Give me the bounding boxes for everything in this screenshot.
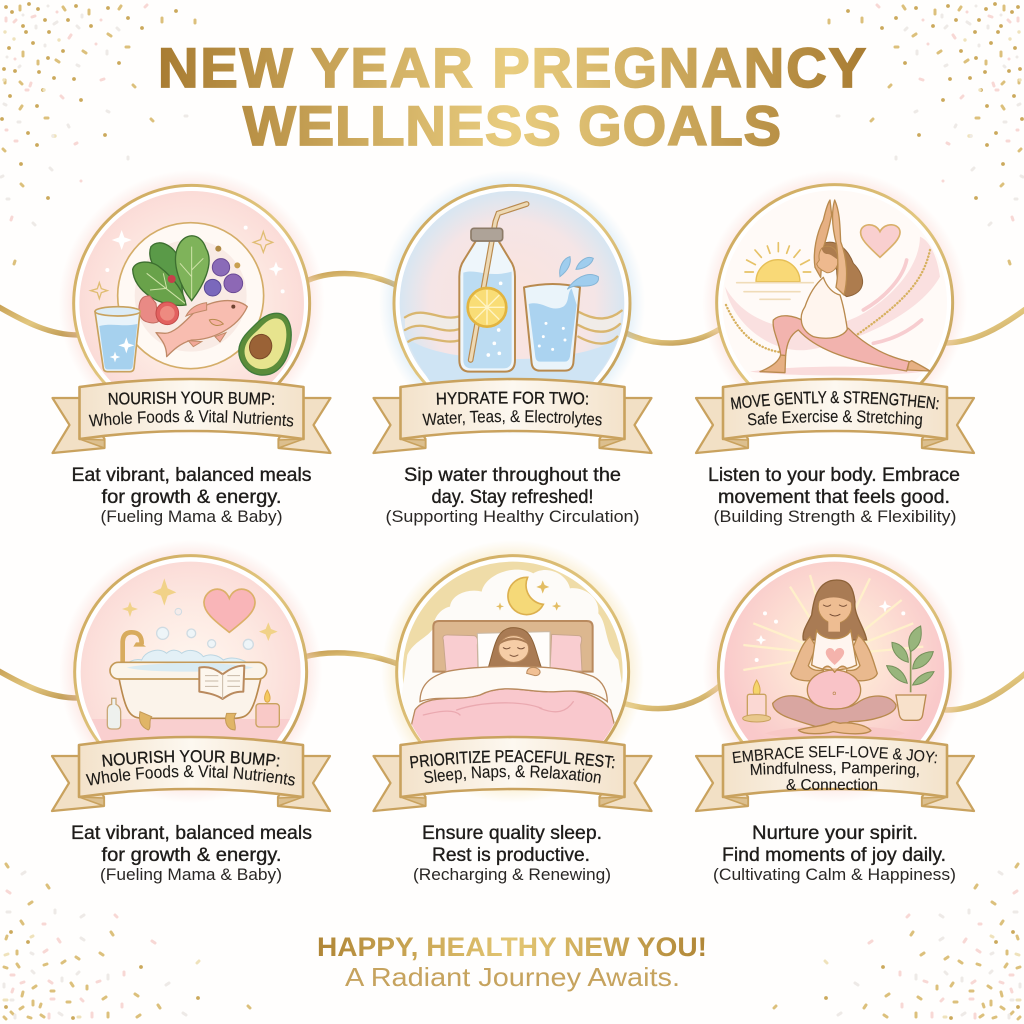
text: bath description [71,823,312,884]
text: nourish description: Eat vibrant, balanced meals [72,465,312,486]
banner: bath: NOURISH YOUR BUMP: [102,750,280,767]
text: nourish description: (Fueling Mama & Baby) [100,507,282,526]
illustration: sleeping in bed [381,540,644,803]
panel: nourish (food) [51,176,332,526]
banner: hydrate: Water, Teas, & Electrolytes [422,410,602,428]
banner: rest: PRIORITIZE PEACEFUL REST: [410,750,615,768]
text: move description: (Building Strength & Flexibility) [714,507,956,526]
title: WELLNESS GOALS [243,94,781,157]
banner: rest [372,736,653,812]
text: nourish description: for growth & energy. [102,487,282,508]
panel: self-love [694,546,976,884]
panel: hydrate [372,176,653,526]
text: rest description [413,823,611,884]
text: hydrate description [386,465,640,526]
illustration: bottle and glass [379,170,645,437]
text: move description: Listen to your body. Embrace [708,465,960,486]
banner: move: MOVE GENTLY & STRENGTHEN: [730,391,939,410]
illustration: meditating mother [703,540,966,803]
footer tagline [317,932,707,992]
illustration: plate of food [58,170,325,437]
banner: bath: Whole Foods & Vital Nutrients [86,764,295,786]
text: hydrate description: Sip water throughout the [404,465,621,486]
footer tagline: HAPPY, HEALTHY NEW YOU! [317,932,707,962]
text: bath description: Eat vibrant, balanced meals [71,823,312,844]
text: hydrate description: (Supporting Healthy Circulation) [386,507,640,526]
banner: move [694,378,976,454]
text: move description [708,465,960,526]
text: rest description: Ensure quality sleep. [422,823,602,844]
text: nourish description [72,465,312,526]
connecting ribbon: row 1 [0,274,1024,343]
text: self-love description: Nurture your spirit. [752,823,918,844]
text: move description: movement that feels good. [718,487,950,508]
banner: nourish [51,378,332,454]
title [158,36,866,157]
banner: hydrate: HYDRATE FOR TWO: [436,392,588,405]
text: rest description: (Recharging & Renewing) [413,865,611,884]
text: self-love description: (Cultivating Calm & Happiness) [713,865,956,884]
banner: nourish: Whole Foods & Vital Nutrients [88,410,294,427]
panel: rest [372,544,653,884]
text: hydrate description: day. Stay refreshed! [432,487,594,508]
text: self-love description: Find moments of joy daily. [722,845,946,866]
panel: bath self-care [50,546,332,884]
text: self-love description [713,823,956,884]
banner: self-love: Mindfulness, Pampering, [750,762,919,778]
title: NEW YEAR PREGNANCY [158,36,866,99]
banner: nourish: NOURISH YOUR BUMP: [108,392,274,405]
banner: rest: Sleep, Naps, & Relaxation [424,765,601,784]
banner: move: Safe Exercise & Stretching [748,410,922,429]
banner: bath [50,736,332,812]
illustration: prenatal yoga lunge [702,170,967,435]
banner: self-love: EMBRACE SELF-LOVE & JOY: [732,746,937,764]
illustration: bubble bath [59,540,322,803]
banner: self-love: & Connection [786,777,878,794]
text: bath description: for growth & energy. [102,845,282,866]
panel: move [694,176,976,526]
footer tagline: A Radiant Journey Awaits. [345,962,680,992]
connecting ribbon: row 2 [0,653,1024,710]
banner: hydrate [372,378,653,454]
text: bath description: (Fueling Mama & Baby) [100,865,282,884]
banner: self-love [694,736,976,812]
text: rest description: Rest is productive. [432,845,590,866]
